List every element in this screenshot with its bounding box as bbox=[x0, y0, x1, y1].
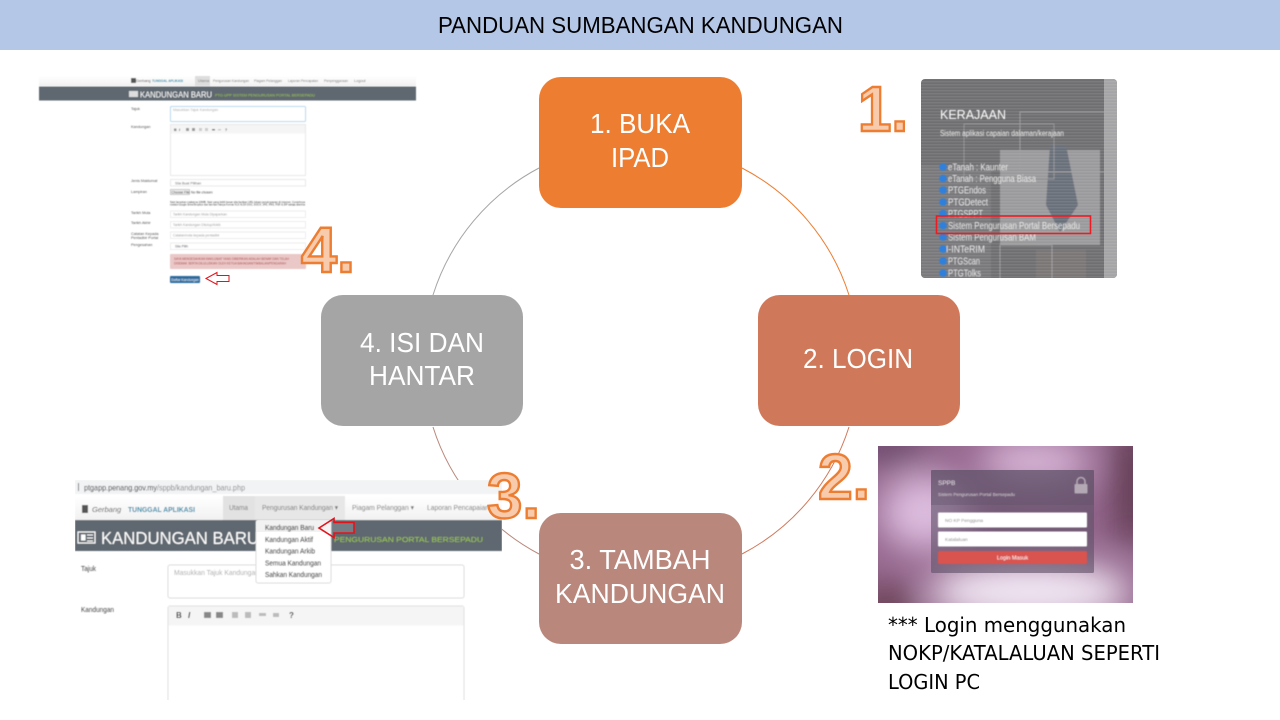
screenshot 1: kerajaan system list: PTGScan bbox=[948, 256, 980, 268]
screenshot 4: borang kandungan baru: Sila Buat Pilihan bbox=[175, 182, 201, 186]
screenshot 4: borang kandungan baru: Catatan Kepada bbox=[131, 232, 159, 236]
screenshot 4: borang kandungan baru: I bbox=[179, 128, 181, 132]
red warning notice bbox=[170, 254, 306, 269]
screenshot 4: borang kandungan baru: Utama bbox=[198, 79, 210, 83]
login note bbox=[888, 613, 1160, 694]
login panel: Katalaluan bbox=[945, 537, 968, 543]
screenshot 3: kandungan menu: Pengurusan Kandungan ▾ bbox=[262, 503, 338, 512]
screenshot 3: kandungan menu: B bbox=[176, 611, 182, 620]
screenshot 4: borang kandungan baru: Sila Pilih bbox=[175, 244, 188, 248]
screenshot 4: borang kandungan baru: DISEMAK SERTA DILULUSKAN OLEH KETUA BAHAGIAN/TIMBALAN/PENGARAH bbox=[174, 262, 287, 266]
screenshot 3: kandungan menu: Masukkan Tajuk Kandungan bbox=[174, 568, 259, 577]
screenshot 3: kandungan menu: ? bbox=[289, 611, 294, 620]
screenshot 4: borang kandungan baru: Daftar Kandungan bbox=[171, 278, 199, 282]
dropdown menu: Kandungan Aktif bbox=[265, 537, 313, 544]
screenshot 4: borang kandungan baru: Penyenggaraan bbox=[324, 79, 348, 83]
screenshot 4: borang kandungan baru: Saiz lampiran maksima 10MB. Saiz yang lebih besar sila berikan URL lokasi penyimpanan di internet. Contohnya bbox=[170, 200, 305, 204]
login panel: Login Masuk bbox=[997, 556, 1028, 562]
screenshot 4: borang kandungan baru: Laporan Pencapaian bbox=[288, 79, 318, 83]
step 4 box: isi dan hantar: 4. ISI DAN bbox=[360, 327, 484, 358]
screenshot 1: kerajaan system list: PTGEndos bbox=[948, 184, 986, 196]
dropdown menu bbox=[256, 520, 331, 583]
step 1 box: buka ipad: 1. BUKA bbox=[590, 108, 690, 139]
screenshot 4: borang kandungan baru: ? bbox=[225, 128, 227, 132]
dropdown menu: Kandungan Arkib bbox=[265, 548, 315, 556]
screenshot 1: kerajaan system list: PTGSPPT bbox=[948, 208, 983, 220]
screenshot 3: kandungan menu: KANDUNGAN BARU bbox=[101, 528, 259, 548]
screenshot 4: borang kandungan baru: B bbox=[174, 128, 177, 132]
screenshot 4: borang kandungan baru: Masukkan Tajuk Kandungan bbox=[173, 108, 218, 112]
address bar bbox=[75, 480, 502, 494]
screenshot 1: kerajaan system list: PTGDetect bbox=[948, 196, 988, 208]
red highlight box bbox=[936, 216, 1090, 234]
login panel: Sistem Pengurusan Portal Bersepadu bbox=[938, 492, 1015, 497]
screenshot 4: borang kandungan baru: Tajuk bbox=[131, 107, 140, 111]
cycle connector arcs bbox=[433, 168, 849, 554]
screenshot 4: borang kandungan baru: Jenis Maklumat bbox=[131, 179, 158, 183]
number 4: 4. bbox=[301, 214, 355, 286]
screenshot 3: kandungan menu: /sppb/kandungan_baru.php bbox=[157, 482, 245, 492]
screenshot 1: kerajaan system list: eTanah : Pengguna Biasa bbox=[948, 173, 1036, 185]
step 1 box: buka ipad bbox=[539, 77, 742, 208]
login note: LOGIN PC bbox=[888, 670, 980, 694]
login panel: NO KP Pengguna bbox=[945, 518, 983, 524]
screenshot 4: borang kandungan baru: Pentadbir Portal bbox=[131, 236, 158, 240]
login panel: SPPB bbox=[938, 480, 955, 487]
screenshot 3: kandungan menu: Piagam Pelanggan ▾ bbox=[352, 503, 414, 512]
screenshot 1: kerajaan system list: Sistem aplikasi capaian dalaman/kerajaan bbox=[940, 129, 1064, 138]
screenshot 1: kerajaan system list: I-INTeRIM bbox=[946, 244, 985, 256]
step 2 box: login bbox=[758, 295, 960, 426]
screenshot 3: kandungan menu: TUNGGAL APLIKASI bbox=[128, 505, 195, 514]
screenshot 4: borang kandungan baru: Logout bbox=[354, 79, 367, 83]
screenshot 4: borang kandungan baru: No file chosen bbox=[191, 190, 213, 194]
screenshot 4: borang kandungan baru: Pengurusan Kandungan bbox=[213, 79, 249, 83]
screenshot 3: kandungan menu: Kandungan bbox=[81, 605, 114, 614]
screenshot 3: kandungan menu: Gerbang bbox=[92, 505, 122, 514]
screenshot 1: kerajaan system list: Sistem Pengurusan Portal Bersepadu bbox=[948, 220, 1080, 232]
screenshot 1: kerajaan system list: Sistem Pengurusan BAM bbox=[948, 232, 1036, 244]
screenshot 4: borang kandungan baru: Choose File bbox=[172, 190, 190, 194]
screenshot 4: borang kandungan baru: TUNGGAL APLIKASI bbox=[152, 79, 183, 83]
number 1: 1. bbox=[858, 73, 908, 145]
screenshot 4: borang kandungan baru: melalui Google Drive/Dropbox dan lain-lain Hanya Format XLS XLSX DOC, DOCX, JPG, PNG, PDF & ZIP sahaja diterima bbox=[170, 202, 305, 206]
screenshot 4: borang kandungan baru: Tarikh Kandungan Mula Dipaparkan bbox=[173, 212, 227, 216]
screenshot 4: borang kandungan baru: Gerbang bbox=[136, 79, 151, 83]
screenshot 3: kandungan menu: Laporan Pencapaian bbox=[427, 503, 489, 512]
screenshot 4: borang kandungan baru: PTG-UPP SISTEM PENGURUSAN PORTAL BERSEPADU bbox=[215, 94, 315, 98]
lock icon bbox=[1074, 478, 1088, 494]
login note: *** Login menggunakan bbox=[888, 613, 1126, 637]
screenshot 3: kandungan menu bbox=[75, 480, 502, 716]
title bar bbox=[0, 0, 1280, 50]
number 3: 3. bbox=[487, 460, 540, 532]
form labels and fields: Tajuk bbox=[81, 564, 96, 573]
screenshot 3: kandungan menu: ptgapp.penang.gov.my bbox=[84, 482, 158, 492]
dropdown menu: Sahkan Kandungan bbox=[265, 572, 322, 579]
screenshot 4: borang kandungan baru: Tarikh Kandungan Ditutup/Arkib bbox=[173, 223, 221, 227]
red arrow bbox=[206, 272, 229, 284]
step 3 box: tambah kandungan: 3. TAMBAH bbox=[570, 544, 710, 575]
step 1 box: buka ipad: IPAD bbox=[611, 142, 669, 173]
title: PANDUAN SUMBANGAN KANDUNGAN bbox=[438, 12, 843, 38]
screenshot 4: borang kandungan baru: Tarikh Mula bbox=[131, 211, 151, 215]
screenshot 4: borang kandungan baru: KANDUNGAN BARU bbox=[140, 90, 212, 100]
screenshot 4: borang kandungan baru: Piagam Pelanggan bbox=[254, 79, 282, 83]
screenshot 4: borang kandungan baru bbox=[39, 76, 416, 284]
screenshot 3: kandungan menu: PENGURUSAN PORTAL BERSEPADU bbox=[334, 537, 483, 544]
step 3 box: tambah kandungan bbox=[539, 513, 742, 644]
screenshot 4: borang kandungan baru: Pengesahan bbox=[131, 243, 152, 247]
dropdown menu: Semua Kandungan bbox=[265, 560, 321, 568]
step 4 box: isi dan hantar: HANTAR bbox=[369, 360, 475, 391]
kerajaan heading: KERAJAAN bbox=[940, 107, 1006, 122]
login note: NOKP/KATALALUAN SEPERTI bbox=[888, 641, 1160, 665]
submit button bbox=[170, 276, 200, 283]
screenshot 3: kandungan menu: Utama bbox=[229, 503, 249, 512]
screenshot 4: borang kandungan baru: Lampiran bbox=[131, 190, 147, 194]
screenshot 3: kandungan menu: I bbox=[188, 611, 191, 620]
page banner bbox=[75, 520, 502, 551]
number 2: 2. bbox=[818, 441, 870, 513]
step 2 box: login: 2. LOGIN bbox=[803, 343, 913, 374]
screenshot 1: kerajaan system list: eTanah : Kaunter bbox=[948, 162, 1008, 174]
screenshot 4: borang kandungan baru: Catatan/nota kepada pentadbir bbox=[173, 234, 220, 238]
login panel bbox=[931, 470, 1094, 573]
screenshot 1: kerajaan system list bbox=[921, 79, 1117, 285]
screenshot 4: borang kandungan baru: SAYA MENGESAHKAN MAKLUMAT YANG DIBERIKAN ADALAH BENAR DAN TELAH bbox=[174, 257, 290, 261]
step 4 box: isi dan hantar bbox=[321, 295, 523, 426]
navigation bar bbox=[75, 504, 502, 520]
screenshot 4: borang kandungan baru: Tarikh Akhir bbox=[131, 221, 151, 225]
screenshot 4: borang kandungan baru: Kandungan bbox=[131, 125, 150, 129]
dropdown menu: Kandungan Baru bbox=[265, 525, 314, 532]
red arrow bbox=[319, 518, 354, 538]
screenshot 1: kerajaan system list: PTGTolks bbox=[948, 268, 981, 280]
step 3 box: tambah kandungan: KANDUNGAN bbox=[555, 578, 725, 609]
screenshot 2: login page bbox=[878, 446, 1133, 603]
